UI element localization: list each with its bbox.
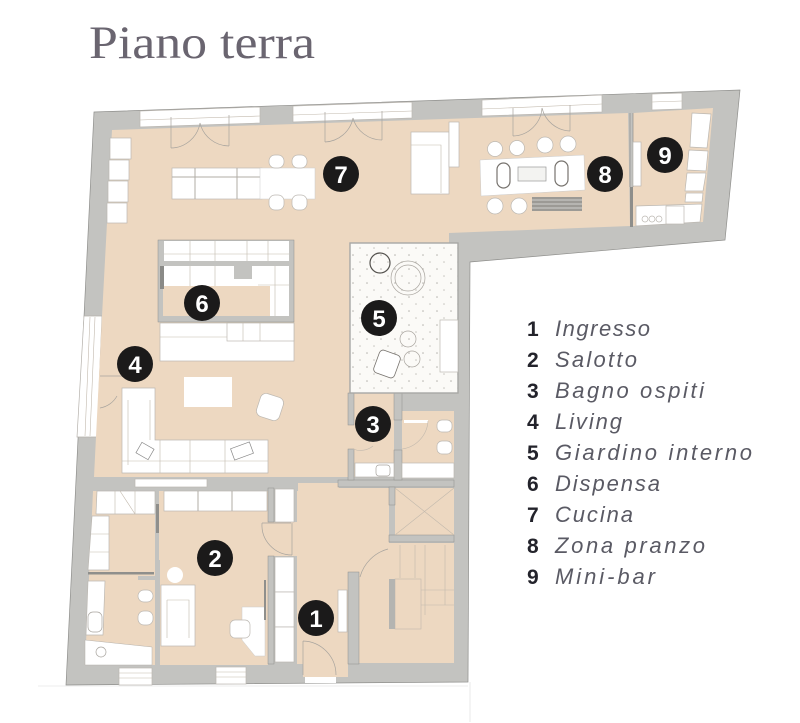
marker 7: 7 (334, 162, 348, 189)
store cross (395, 488, 454, 535)
coat bench (338, 590, 347, 632)
cabinets below pantry (160, 323, 294, 361)
left wall cabinets (107, 138, 131, 223)
salotto furniture (161, 491, 267, 656)
lower left bath fixtures (85, 491, 155, 665)
legend item 2: 2 (527, 349, 539, 372)
marker 5 (361, 300, 397, 336)
legend item 4 (527, 409, 623, 434)
interior walls (94, 393, 458, 666)
legend item 3: 3 (527, 380, 539, 403)
marker 6 (184, 285, 220, 321)
bottom windows (119, 667, 336, 685)
doors top (171, 105, 570, 148)
wood floor: kitchen, dining, living (94, 113, 630, 477)
wardrobe (275, 489, 294, 662)
legend item 8: Zona pranzo (554, 533, 705, 558)
living rug and armchair (184, 377, 285, 422)
wood floor: lower left bath (85, 491, 155, 665)
marker 8: 8 (598, 162, 612, 189)
console (135, 479, 207, 487)
mini-bar cabinets (633, 113, 711, 226)
dining sofa block (411, 122, 459, 194)
left window (77, 316, 102, 437)
legend item 1: Ingresso (555, 316, 650, 341)
marker 1: 1 (309, 606, 323, 633)
divider wall between dining and mini-bar (630, 113, 633, 227)
wood floor: passage (268, 522, 298, 556)
legend item 9: 9 (527, 566, 539, 589)
wood floor: guest bath (350, 393, 394, 477)
dining table (480, 136, 585, 214)
marker 3 (355, 406, 391, 442)
title: Piano terra (89, 17, 315, 69)
legend item 6: 6 (527, 473, 539, 496)
wood floor: small bath (402, 411, 454, 478)
floor plan (38, 90, 740, 722)
legend item 8: 8 (527, 535, 539, 558)
door arcs (262, 523, 388, 675)
marker 2 (197, 540, 233, 576)
site line (38, 682, 470, 722)
legend item 4: Living (555, 409, 623, 434)
legend item 5: 5 (527, 442, 539, 465)
marker 2: 2 (208, 546, 222, 573)
marker 5: 5 (372, 306, 386, 333)
building walls (66, 90, 740, 685)
marker 3: 3 (366, 412, 380, 439)
legend (527, 316, 752, 589)
legend item 4: 4 (527, 411, 539, 434)
left door (100, 376, 122, 408)
garden (350, 243, 458, 393)
marker 1 (298, 600, 334, 636)
legend item 7: 7 (527, 504, 539, 527)
legend item 3: Bagno ospiti (555, 378, 705, 403)
legend item 5: Giardino interno (555, 440, 752, 465)
top windows (140, 93, 682, 127)
marker 9: 9 (658, 143, 672, 170)
wood floor: stairs and store (359, 488, 454, 663)
marker 8 (587, 156, 623, 192)
wood floor: salotto (159, 491, 268, 665)
legend item 1: 1 (527, 318, 539, 341)
marker 9 (647, 137, 683, 173)
pantry block (158, 240, 294, 322)
marker 4: 4 (128, 352, 142, 379)
wood floor: entrance lobby (297, 483, 389, 677)
stairs (389, 545, 454, 629)
guest bath fixtures (353, 420, 454, 478)
legend item 7: Cucina (555, 502, 633, 527)
legend item 6: Dispensa (555, 471, 660, 496)
marker 4 (117, 346, 153, 382)
legend item 9: Mini-bar (555, 564, 657, 589)
marker 7 (323, 156, 359, 192)
legend item 2: Salotto (555, 347, 637, 372)
marker 6: 6 (195, 291, 209, 318)
living sofa (122, 388, 268, 473)
kitchen island (172, 155, 315, 210)
wood floor: mini-bar (633, 108, 713, 226)
